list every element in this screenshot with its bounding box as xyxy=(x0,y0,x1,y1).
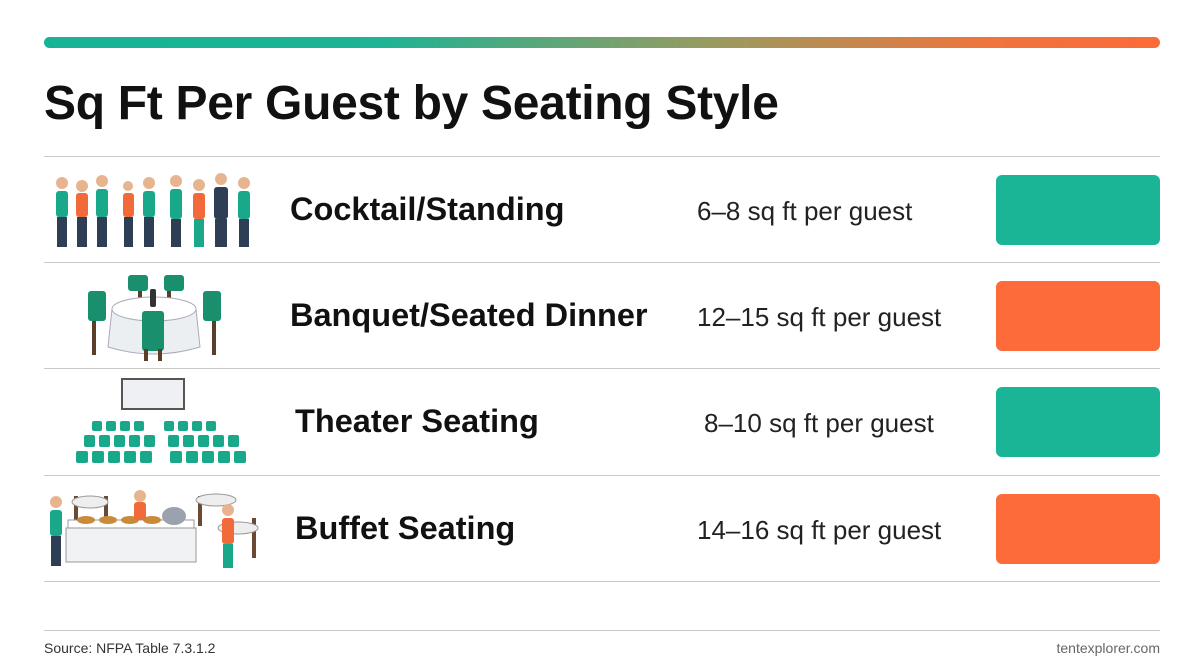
icon: round table with chairs xyxy=(88,275,221,361)
row: cocktail xyxy=(56,173,1160,247)
title: Sq Ft Per Guest by Seating Style xyxy=(44,77,779,130)
label: Theater Seating xyxy=(295,403,539,439)
footer source: Source: NFPA Table 7.3.1.2 xyxy=(44,640,215,656)
swatch teal xyxy=(996,387,1160,457)
label: Cocktail/Standing xyxy=(290,191,564,227)
label: Buffet Seating xyxy=(295,510,515,546)
swatch teal xyxy=(996,175,1160,245)
swatch orange xyxy=(996,281,1160,351)
row: buffet xyxy=(50,490,1160,568)
row: banquet xyxy=(88,275,1160,361)
gradient top bar xyxy=(44,37,1160,48)
value: 12–15 sq ft per guest xyxy=(697,302,941,332)
value: 14–16 sq ft per guest xyxy=(697,515,941,545)
value: 6–8 sq ft per guest xyxy=(697,196,912,226)
icon: standing people xyxy=(56,173,250,247)
swatch orange xyxy=(996,494,1160,564)
row: theater xyxy=(76,378,1160,463)
footer brand: tentexplorer.com xyxy=(1056,640,1160,656)
icon: screen and chair rows xyxy=(76,378,246,463)
icon: buffet table xyxy=(50,490,258,568)
value: 8–10 sq ft per guest xyxy=(704,408,934,438)
label: Banquet/Seated Dinner xyxy=(290,297,648,333)
